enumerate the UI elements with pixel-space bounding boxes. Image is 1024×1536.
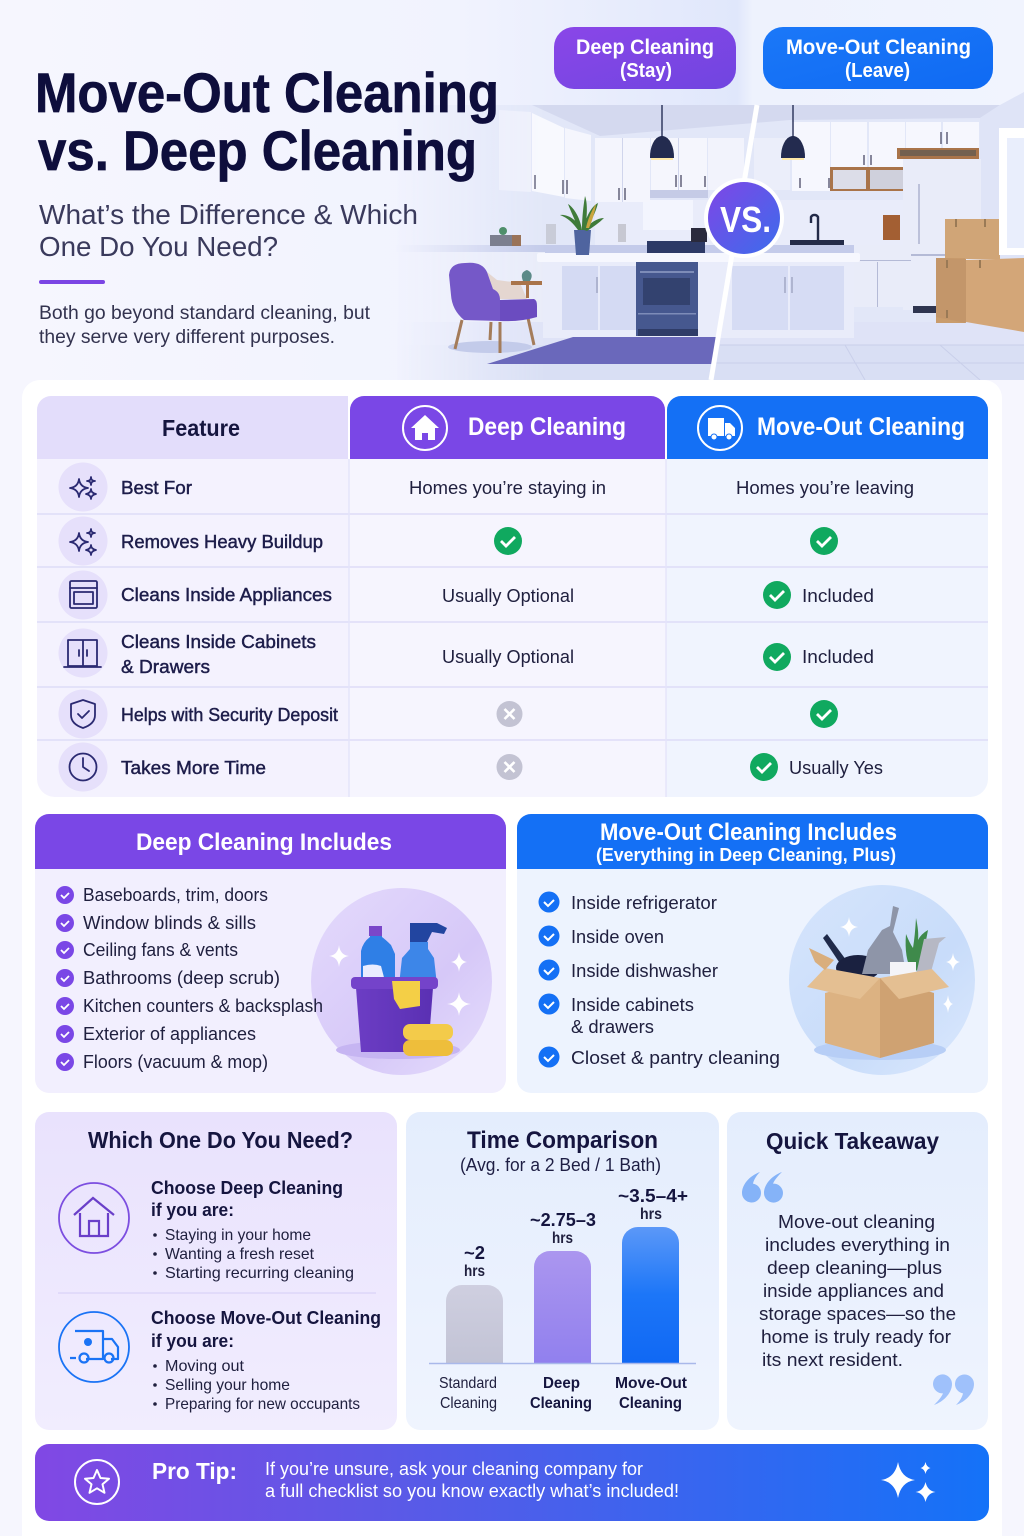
- block: choose deep cleaning: Staying in your home: [165, 1227, 311, 1244]
- icon: sparkles: [881, 1462, 936, 1502]
- row: best for: [58, 462, 914, 512]
- takeaway text: inside appliances and: [763, 1280, 944, 1301]
- checklist: [56, 884, 323, 1072]
- heading: Which One Do You Need?: [88, 1127, 353, 1153]
- white content card: [22, 380, 1002, 1536]
- row: cleans inside cabinets and drawers: Usually Optional: [442, 646, 574, 667]
- checklist: Closet & pantry cleaning: [571, 1047, 780, 1068]
- panel: deep cleaning includes: [35, 814, 506, 1093]
- row: cleans inside cabinets and drawers: [58, 628, 874, 678]
- block: choose move-out cleaning: Selling your home: [165, 1377, 290, 1394]
- subtitle: What’s the Difference & Which: [39, 199, 418, 230]
- vs badge: VS.: [720, 199, 771, 240]
- checklist: Inside dishwasher: [571, 960, 718, 981]
- block: choose deep cleaning: Starting recurring cleaning: [165, 1265, 354, 1282]
- block: choose move-out cleaning: Moving out: [165, 1358, 245, 1375]
- intro text: Both go beyond standard cleaning, but: [39, 303, 371, 324]
- checklist: [538, 892, 780, 1068]
- panel: time comparison: [406, 1112, 719, 1430]
- icon: moving truck: [59, 1312, 129, 1382]
- pro tip label: Pro Tip:: [152, 1458, 237, 1484]
- intro text: [39, 303, 371, 348]
- bar chart: ~2.75–3: [530, 1210, 596, 1230]
- takeaway text: [759, 1211, 956, 1370]
- pro tip text: [265, 1459, 679, 1501]
- row: best for: Homes you’re staying in: [409, 477, 606, 498]
- row: cleans inside cabinets and drawers: Included: [802, 646, 874, 667]
- deep column body: [349, 459, 666, 797]
- badge: move-out cleaning: (Leave): [845, 60, 910, 82]
- title: vs. Deep Cleaning: [38, 119, 477, 182]
- bar chart: Cleaning: [440, 1395, 497, 1412]
- badge: deep cleaning: Deep Cleaning: [576, 36, 714, 59]
- takeaway text: its next resident.: [762, 1349, 903, 1370]
- takeaway text: includes everything in: [765, 1234, 950, 1255]
- heading: Quick Takeaway: [766, 1128, 939, 1154]
- row: takes more time: Usually Yes: [789, 757, 883, 778]
- takeaway text: storage spaces—so the: [759, 1303, 956, 1324]
- panel: which one do you need: [35, 1112, 397, 1430]
- icon: house: [59, 1183, 129, 1253]
- heading: (Avg. for a 2 Bed / 1 Bath): [460, 1155, 661, 1175]
- row: cleans inside cabinets and drawers: Cleans Inside Cabinets: [121, 631, 316, 652]
- block: choose deep cleaning: [151, 1177, 354, 1282]
- heading: [517, 814, 988, 869]
- block: choose move-out cleaning: Preparing for new occupants: [165, 1396, 360, 1413]
- kitchen illustration: [390, 92, 1024, 380]
- badge: deep cleaning: (Stay): [620, 60, 672, 82]
- takeaway text: home is truly ready for: [761, 1326, 951, 1347]
- vs badge: [704, 178, 784, 258]
- checklist: Inside oven: [571, 926, 664, 947]
- block: choose move-out cleaning: Choose Move-Out Cleaning: [151, 1307, 381, 1328]
- checklist: Kitchen counters & backsplash: [83, 995, 323, 1016]
- pro tip text: a full checklist so you know exactly what’s included!: [265, 1481, 679, 1501]
- bar chart: Cleaning: [619, 1395, 682, 1412]
- header: move-out cleaning: [667, 396, 988, 459]
- row: cleans inside cabinets and drawers: & Drawers: [121, 656, 210, 677]
- pro tip text: If you’re unsure, ask your cleaning company for: [265, 1459, 643, 1479]
- checklist: Inside cabinets: [571, 994, 694, 1015]
- row: helps with security deposit: [58, 690, 838, 738]
- row: helps with security deposit: Helps with Security Deposit: [121, 704, 338, 725]
- heading: Time Comparison: [467, 1127, 658, 1154]
- row: removes heavy buildup: [58, 516, 838, 566]
- row: cleans inside appliances: [58, 570, 874, 620]
- badge: deep cleaning: [554, 27, 736, 89]
- block: choose deep cleaning: Wanting a fresh reset: [165, 1246, 315, 1263]
- heading: Deep Cleaning Includes: [136, 829, 392, 856]
- block: choose deep cleaning: Choose Deep Cleaning: [151, 1177, 343, 1198]
- header: deep cleaning: [350, 396, 665, 459]
- comparison table: [37, 396, 988, 797]
- hero background: [0, 0, 1024, 380]
- badge: move-out cleaning: Move-Out Cleaning: [786, 36, 971, 59]
- bar chart: Move-Out: [615, 1375, 688, 1392]
- bar chart: ~3.5–4+: [618, 1186, 688, 1206]
- row: best for: Homes you’re leaving: [736, 477, 914, 498]
- header: deep cleaning: Deep Cleaning: [468, 413, 626, 441]
- panel: move-out cleaning includes: [517, 814, 988, 1093]
- row: removes heavy buildup: Removes Heavy Buildup: [121, 531, 323, 552]
- icon: opening quote: [742, 1172, 783, 1203]
- title: Move-Out Cleaning: [35, 61, 499, 124]
- takeaway text: Move-out cleaning: [778, 1211, 935, 1232]
- checklist: Ceiling fans & vents: [83, 939, 238, 960]
- checklist: Exterior of appliances: [83, 1023, 256, 1044]
- bar chart: Deep: [543, 1375, 580, 1392]
- bar chart: hrs: [464, 1263, 485, 1280]
- heading: (Everything in Deep Cleaning, Plus): [596, 845, 896, 865]
- checklist: Window blinds & sills: [83, 912, 256, 933]
- icon: closing quote: [933, 1374, 974, 1405]
- block: choose move-out cleaning: if you are:: [151, 1330, 234, 1351]
- panel: pro tip: [35, 1444, 989, 1521]
- subtitle: [39, 199, 418, 262]
- checklist: Baseboards, trim, doors: [83, 884, 268, 905]
- subtitle: One Do You Need?: [39, 231, 278, 262]
- bar chart: Standard: [439, 1375, 497, 1392]
- icon: moving box: [789, 885, 975, 1075]
- bar chart: [429, 1186, 696, 1412]
- heading: [35, 814, 506, 869]
- move-out column body: [666, 459, 988, 797]
- block: choose move-out cleaning: [151, 1307, 381, 1413]
- row: best for: Best For: [121, 477, 192, 498]
- bar chart: hrs: [640, 1206, 662, 1223]
- row: cleans inside appliances: Usually Optional: [442, 585, 574, 606]
- row: takes more time: Takes More Time: [121, 757, 266, 778]
- takeaway text: deep cleaning—plus: [767, 1257, 942, 1278]
- badge: move-out cleaning: [763, 27, 993, 89]
- icon: cleaning bucket: [311, 888, 492, 1075]
- block: choose deep cleaning: if you are:: [151, 1199, 234, 1220]
- bar chart: Cleaning: [530, 1395, 592, 1412]
- checklist: & drawers: [571, 1016, 654, 1037]
- panel: quick takeaway: [727, 1112, 988, 1430]
- accent bar: [39, 280, 105, 284]
- heading: [460, 1127, 661, 1175]
- header: feature: [37, 396, 348, 459]
- title: [35, 61, 499, 182]
- bar chart: ~2: [464, 1243, 485, 1263]
- feature column body: [37, 459, 349, 797]
- checklist: Inside refrigerator: [571, 892, 717, 913]
- bar chart: hrs: [552, 1230, 573, 1247]
- intro text: they serve very different purposes.: [39, 327, 335, 348]
- heading: Move-Out Cleaning Includes: [600, 819, 897, 846]
- header: feature: Feature: [162, 415, 240, 441]
- header: move-out cleaning: Move-Out Cleaning: [757, 413, 965, 441]
- row: cleans inside appliances: Cleans Inside Appliances: [121, 584, 332, 605]
- icon: star badge: [75, 1460, 119, 1504]
- row: takes more time: [58, 742, 883, 792]
- checklist: Bathrooms (deep scrub): [83, 967, 280, 988]
- divider line: [711, 105, 757, 380]
- row: cleans inside appliances: Included: [802, 585, 874, 606]
- checklist: Floors (vacuum & mop): [83, 1051, 268, 1072]
